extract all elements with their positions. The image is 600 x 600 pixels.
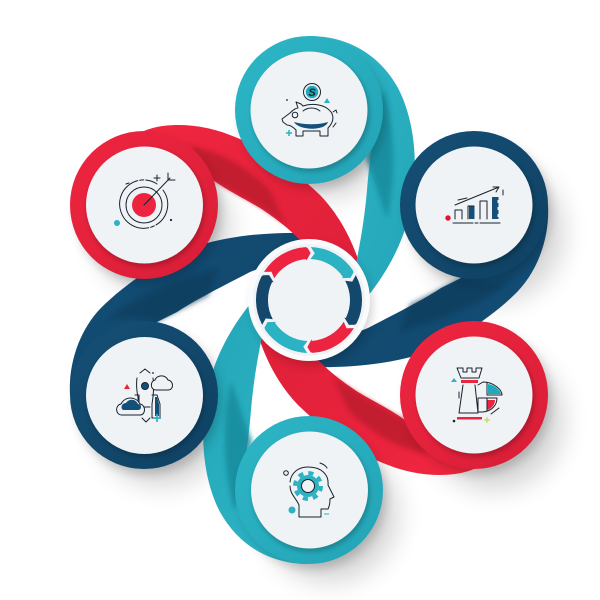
node: top left target [70,131,218,279]
ribbon: teal top right [309,36,415,296]
icon: piggy bank: S [308,87,316,99]
icon: head with gear [284,463,334,517]
node: top right chart [400,131,548,279]
icon: growth bar chart [445,187,503,223]
circle shadows on ribbons [75,43,551,569]
node: top savings [235,36,383,184]
ribbon: navy left [70,233,310,395]
center cycle disc [242,235,376,365]
cycle arrows [242,235,376,365]
ribbon: navy right [308,205,548,367]
icon: piggy bank [282,84,337,136]
icon: rocket and clouds [117,369,172,422]
icon: target with arrow [114,173,175,228]
icon: chess rook and pie [451,368,502,423]
node: bottom left rocket [70,321,218,469]
node: bottom right strategy [400,321,548,469]
ground shadows [94,62,564,582]
ribbon: teal bottom left [203,304,309,564]
ribbon: red top left [144,125,360,300]
ribbon: red bottom right [258,300,474,475]
node: bottom head [235,416,383,564]
